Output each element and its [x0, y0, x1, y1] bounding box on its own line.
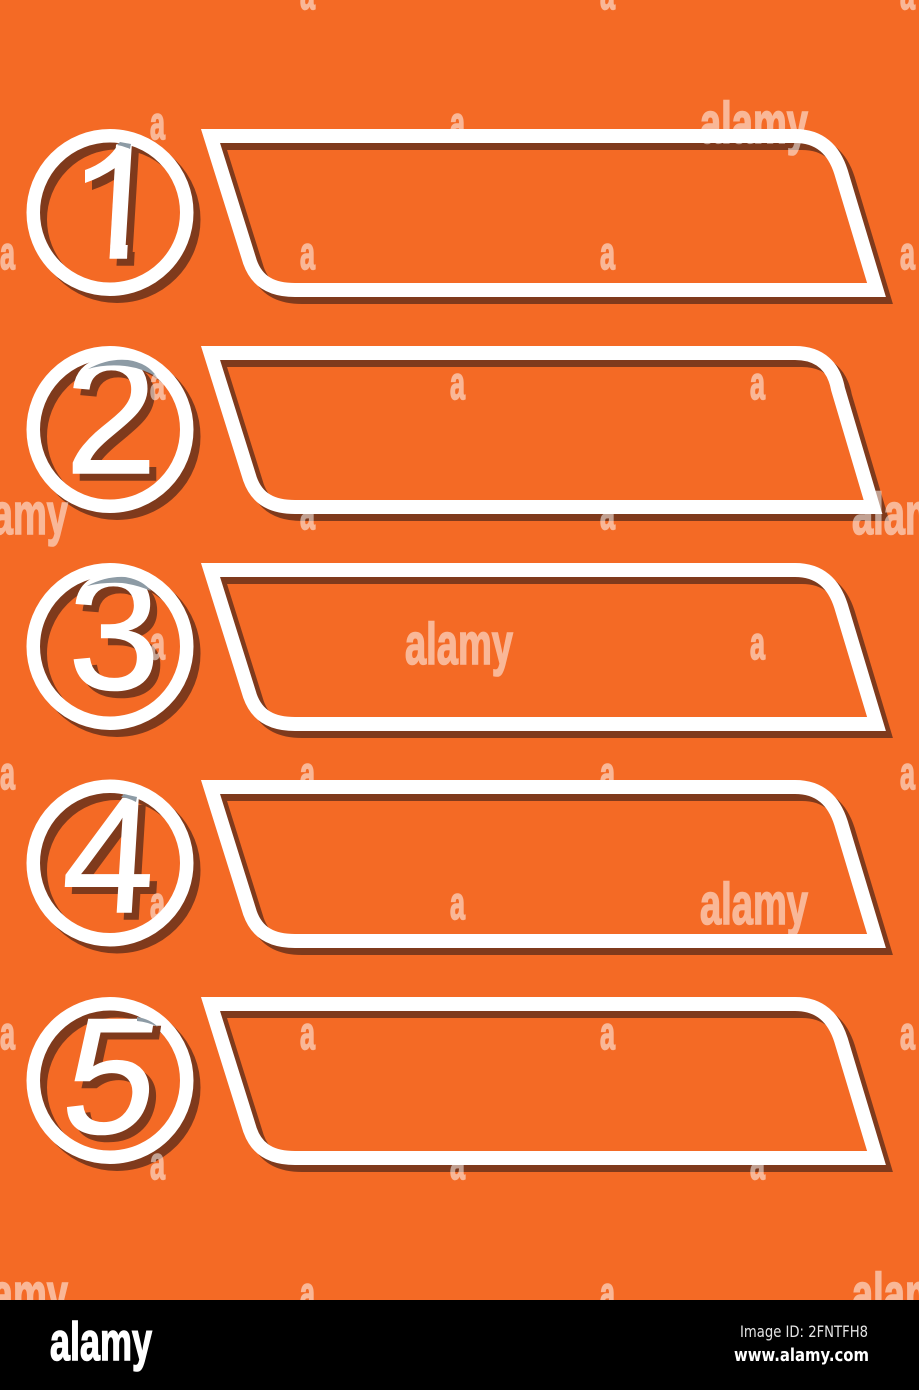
watermarks: a	[450, 877, 465, 929]
watermarks: a	[750, 357, 765, 409]
panel 2	[210, 353, 880, 514]
badge 4	[33, 762, 194, 954]
panel 1	[210, 136, 884, 297]
badge 3	[33, 540, 194, 731]
badge 5: 5	[58, 992, 179, 1176]
footer bar	[0, 1300, 919, 1390]
watermarks: a	[300, 1007, 315, 1059]
watermarks: a	[150, 617, 165, 669]
badge 2: 2	[72, 331, 164, 515]
badge 5: 5	[51, 985, 172, 1169]
badge 4: 4	[65, 769, 168, 954]
panel 5	[210, 1004, 884, 1165]
panel 4	[210, 787, 884, 948]
image id: Image ID: 2FNTFH8	[740, 1322, 868, 1341]
watermarks: a	[600, 227, 615, 279]
badge 3: 3	[75, 547, 167, 731]
watermarks: a	[600, 1007, 615, 1059]
watermarks: a	[750, 617, 765, 669]
watermarks: a	[300, 487, 315, 539]
watermarks: alamy	[700, 872, 808, 937]
watermarks: a	[750, 1137, 765, 1189]
footer logo: alamy	[50, 1312, 152, 1372]
watermarks: alamy	[700, 91, 808, 156]
watermarks: a	[0, 227, 15, 279]
watermarks: a	[0, 747, 15, 799]
watermarks: a	[300, 1267, 315, 1319]
watermarks: a	[450, 357, 465, 409]
watermarks: a	[150, 97, 165, 149]
watermarks: a	[300, 747, 315, 799]
watermarks: a	[450, 1137, 465, 1189]
badge 1: 1	[73, 115, 176, 300]
watermarks: alamy	[405, 612, 513, 677]
badge 1	[33, 108, 194, 300]
panel 3	[210, 570, 884, 731]
badge 2: 2	[65, 324, 157, 508]
website: www.alamy.com	[734, 1345, 869, 1366]
watermarks: a	[150, 877, 165, 929]
watermarks: a	[300, 227, 315, 279]
watermarks: a	[150, 357, 165, 409]
badge 2	[33, 324, 194, 515]
badge 4: 4	[58, 762, 161, 947]
watermarks: a	[450, 97, 465, 149]
watermarks: a	[150, 1137, 165, 1189]
badge 1: 1	[66, 108, 169, 293]
badge 3: 3	[68, 540, 160, 724]
watermarks: a	[600, 747, 615, 799]
watermarks: a	[600, 1267, 615, 1319]
watermarks: a	[0, 1007, 15, 1059]
watermarks: a	[600, 487, 615, 539]
